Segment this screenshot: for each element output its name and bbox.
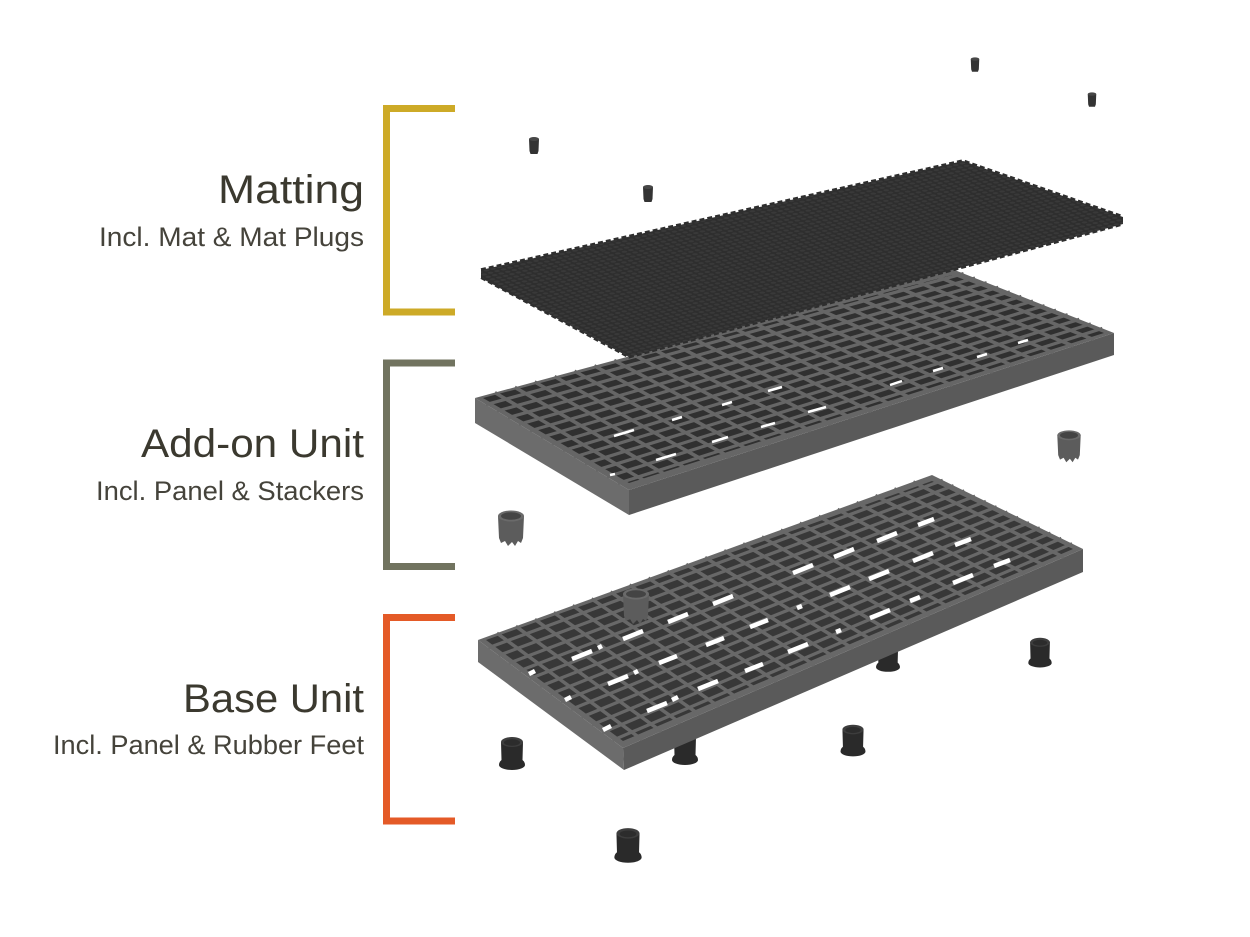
bracket: base unit xyxy=(386,618,455,821)
base panel cross ribs xyxy=(497,482,1064,740)
stacker on base panel xyxy=(623,588,649,624)
mat body xyxy=(481,161,1123,357)
bracket: add-on unit xyxy=(386,363,455,566)
mat plug: top xyxy=(971,57,979,72)
mat crenellated top edge xyxy=(481,160,1123,270)
mat plug: centre xyxy=(643,185,653,202)
rubber foot: left xyxy=(499,737,525,770)
matting sheet xyxy=(481,160,1123,358)
label: matting xyxy=(99,108,455,312)
subheading: matting: Incl. Mat & Mat Plugs xyxy=(99,222,364,252)
heading: add-on unit: Add-on Unit xyxy=(141,422,364,466)
base panel white gaps xyxy=(529,519,1010,730)
add-on panel holes xyxy=(483,275,1104,483)
add-on panel cross ribs xyxy=(495,274,1094,484)
heading: base unit: Base Unit xyxy=(183,677,364,721)
subheading: add-on unit: Incl. Panel & Stackers xyxy=(96,476,364,506)
rubber foot: middle xyxy=(841,725,865,756)
rubber foot behind base panel, rear xyxy=(876,641,900,672)
base panel left side xyxy=(478,640,624,770)
subheading: base unit: Incl. Panel & Rubber Feet xyxy=(53,730,364,760)
mat plug: right xyxy=(1088,92,1096,107)
rubber foot: front xyxy=(614,828,642,863)
add-on panel long ribs xyxy=(486,274,1102,483)
label: add-on unit xyxy=(96,363,455,566)
base panel long ribs xyxy=(488,480,1072,740)
bracket: matting xyxy=(386,108,455,312)
mat crenellated bottom edge xyxy=(481,224,1123,358)
rubber foot: rear right xyxy=(1028,638,1052,668)
mat plug: left xyxy=(529,137,539,154)
add-on unit panel xyxy=(475,269,1114,515)
base panel holes xyxy=(486,481,1073,741)
add-on panel top surface xyxy=(475,269,1114,490)
stacker: left xyxy=(498,510,524,546)
rubber foot behind base panel, front xyxy=(672,732,698,765)
base panel front side xyxy=(623,549,1083,770)
add-on panel white gaps xyxy=(610,340,1028,475)
stacker: right xyxy=(1057,430,1081,462)
label: base unit xyxy=(53,618,455,821)
add-on panel left side xyxy=(475,398,629,515)
base panel top surface xyxy=(478,475,1083,748)
base unit panel xyxy=(478,475,1083,770)
heading: matting: Matting xyxy=(218,168,364,212)
add-on panel front side xyxy=(629,333,1114,515)
